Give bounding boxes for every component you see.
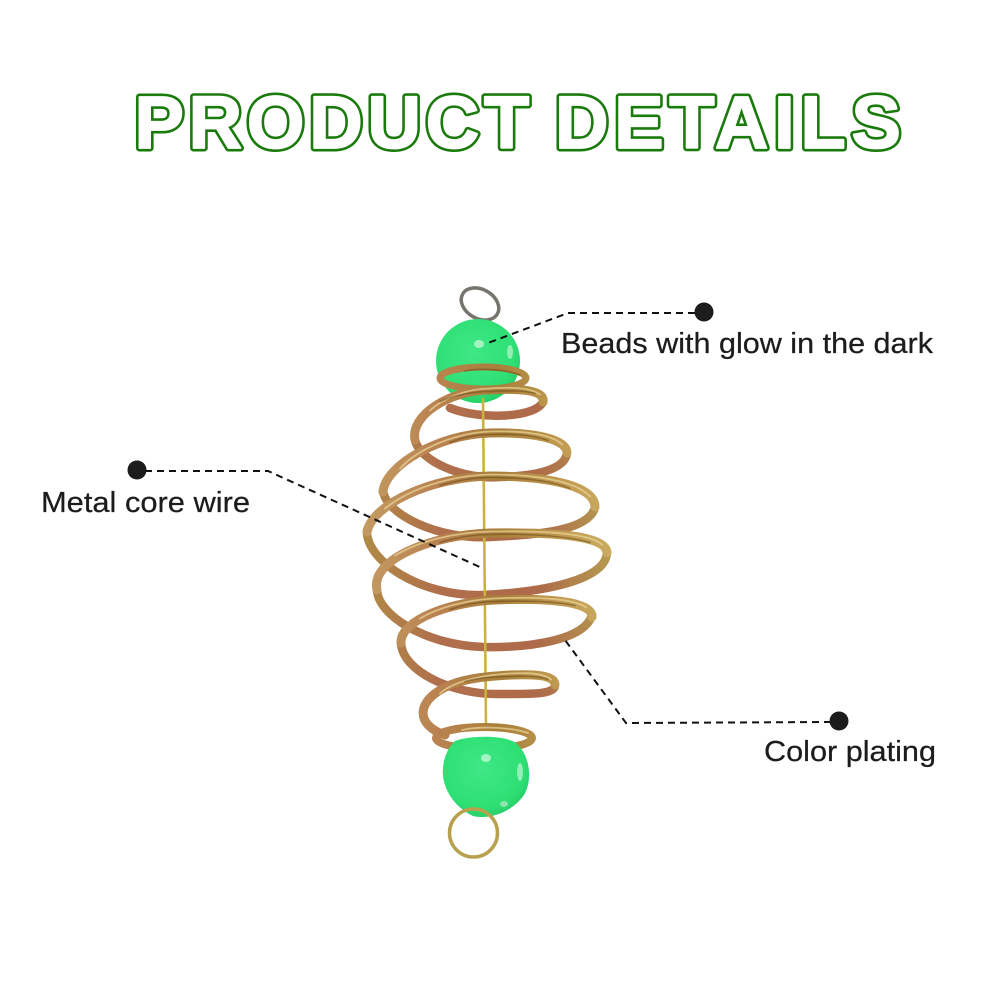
- product: spring feeder: [367, 281, 607, 857]
- title: PRODUCT: [134, 81, 534, 164]
- callout: beads: [488, 302, 934, 360]
- icon: bottom wire loop: [450, 809, 498, 857]
- icon: bottom green bead: [443, 737, 529, 817]
- center metal wire: [483, 398, 486, 728]
- callout: metal core wire: Metal core wire: [41, 487, 250, 519]
- callout: color plating: [565, 640, 936, 768]
- coil highlights: [385, 388, 602, 694]
- callout: metal core wire: [41, 460, 482, 568]
- bottom collar ring: [436, 727, 532, 749]
- callout: beads: Beads with glow in the dark: [561, 328, 934, 360]
- title: DETAILS: [555, 81, 907, 164]
- back coil arcs: [367, 402, 607, 694]
- front coil arcs: [367, 389, 607, 735]
- title: PRODUCT: [134, 81, 534, 164]
- callout: color plating: Color plating: [764, 736, 936, 768]
- icon: top wire loop: [455, 281, 505, 327]
- title: [134, 81, 907, 164]
- title: DETAILS: [555, 81, 907, 164]
- icon: top green bead: [436, 319, 520, 403]
- top collar ring: [440, 367, 526, 389]
- coil dark reflections: [440, 391, 590, 682]
